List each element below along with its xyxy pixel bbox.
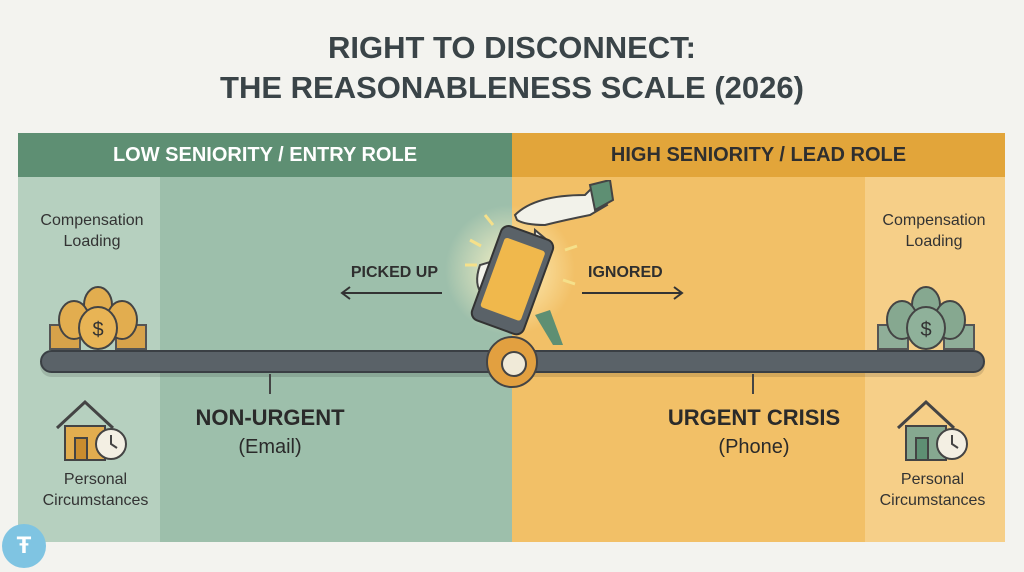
text: non-urgent — [195, 405, 345, 458]
text: personal circumstances left: Circumstances — [43, 492, 148, 509]
icon: house clock left — [56, 400, 127, 461]
text: personal circumstances left — [43, 471, 148, 509]
icon: phone with hands — [451, 180, 614, 345]
text: compensation left: Loading — [64, 233, 120, 250]
text: non-urgent: NON-URGENT — [195, 405, 345, 430]
icon: pivot — [486, 336, 538, 388]
label: picked up with arrow — [340, 264, 442, 300]
text: urgent crisis: URGENT CRISIS — [668, 405, 840, 430]
logo: Ŧ — [17, 532, 31, 559]
text: personal circumstances right: Circumstances — [880, 492, 985, 509]
icon: money bags right: $ — [920, 319, 932, 341]
logo — [2, 524, 46, 568]
header: low seniority: LOW SENIORITY / ENTRY ROLE — [113, 144, 417, 166]
label: picked up with arrow: PICKED UP — [351, 264, 438, 281]
tick left — [269, 374, 271, 394]
panel: high seniority — [512, 133, 1005, 542]
text: compensation right: Compensation — [882, 212, 986, 229]
header: high seniority — [512, 133, 1005, 177]
title: THE REASONABLENESS SCALE (2026) — [220, 70, 804, 105]
text: compensation right — [882, 212, 986, 250]
panel: low seniority — [18, 133, 512, 542]
side column left — [18, 177, 160, 542]
text: urgent crisis — [668, 405, 840, 458]
tick right — [752, 374, 754, 394]
icon: money bags right — [877, 286, 975, 350]
text: compensation left — [40, 212, 144, 250]
icon: money bags left — [49, 286, 147, 350]
label: ignored with arrow: IGNORED — [588, 264, 663, 281]
text: urgent crisis: (Phone) — [718, 436, 790, 458]
header: low seniority — [18, 133, 512, 177]
title — [220, 30, 804, 105]
text: non-urgent: (Email) — [238, 436, 302, 458]
scale bar — [40, 350, 985, 373]
icon: money bags left: $ — [92, 319, 104, 341]
header: high seniority: HIGH SENIORITY / LEAD ROLE — [611, 144, 906, 166]
text: compensation right: Loading — [906, 233, 962, 250]
text: compensation left: Compensation — [40, 212, 144, 229]
side column right — [865, 177, 1005, 542]
label: ignored with arrow — [582, 264, 684, 300]
text: personal circumstances left: Personal — [64, 471, 127, 488]
icon: house clock right — [897, 400, 968, 461]
text: personal circumstances right — [880, 471, 985, 509]
text: personal circumstances right: Personal — [901, 471, 964, 488]
title: RIGHT TO DISCONNECT: — [328, 30, 696, 65]
